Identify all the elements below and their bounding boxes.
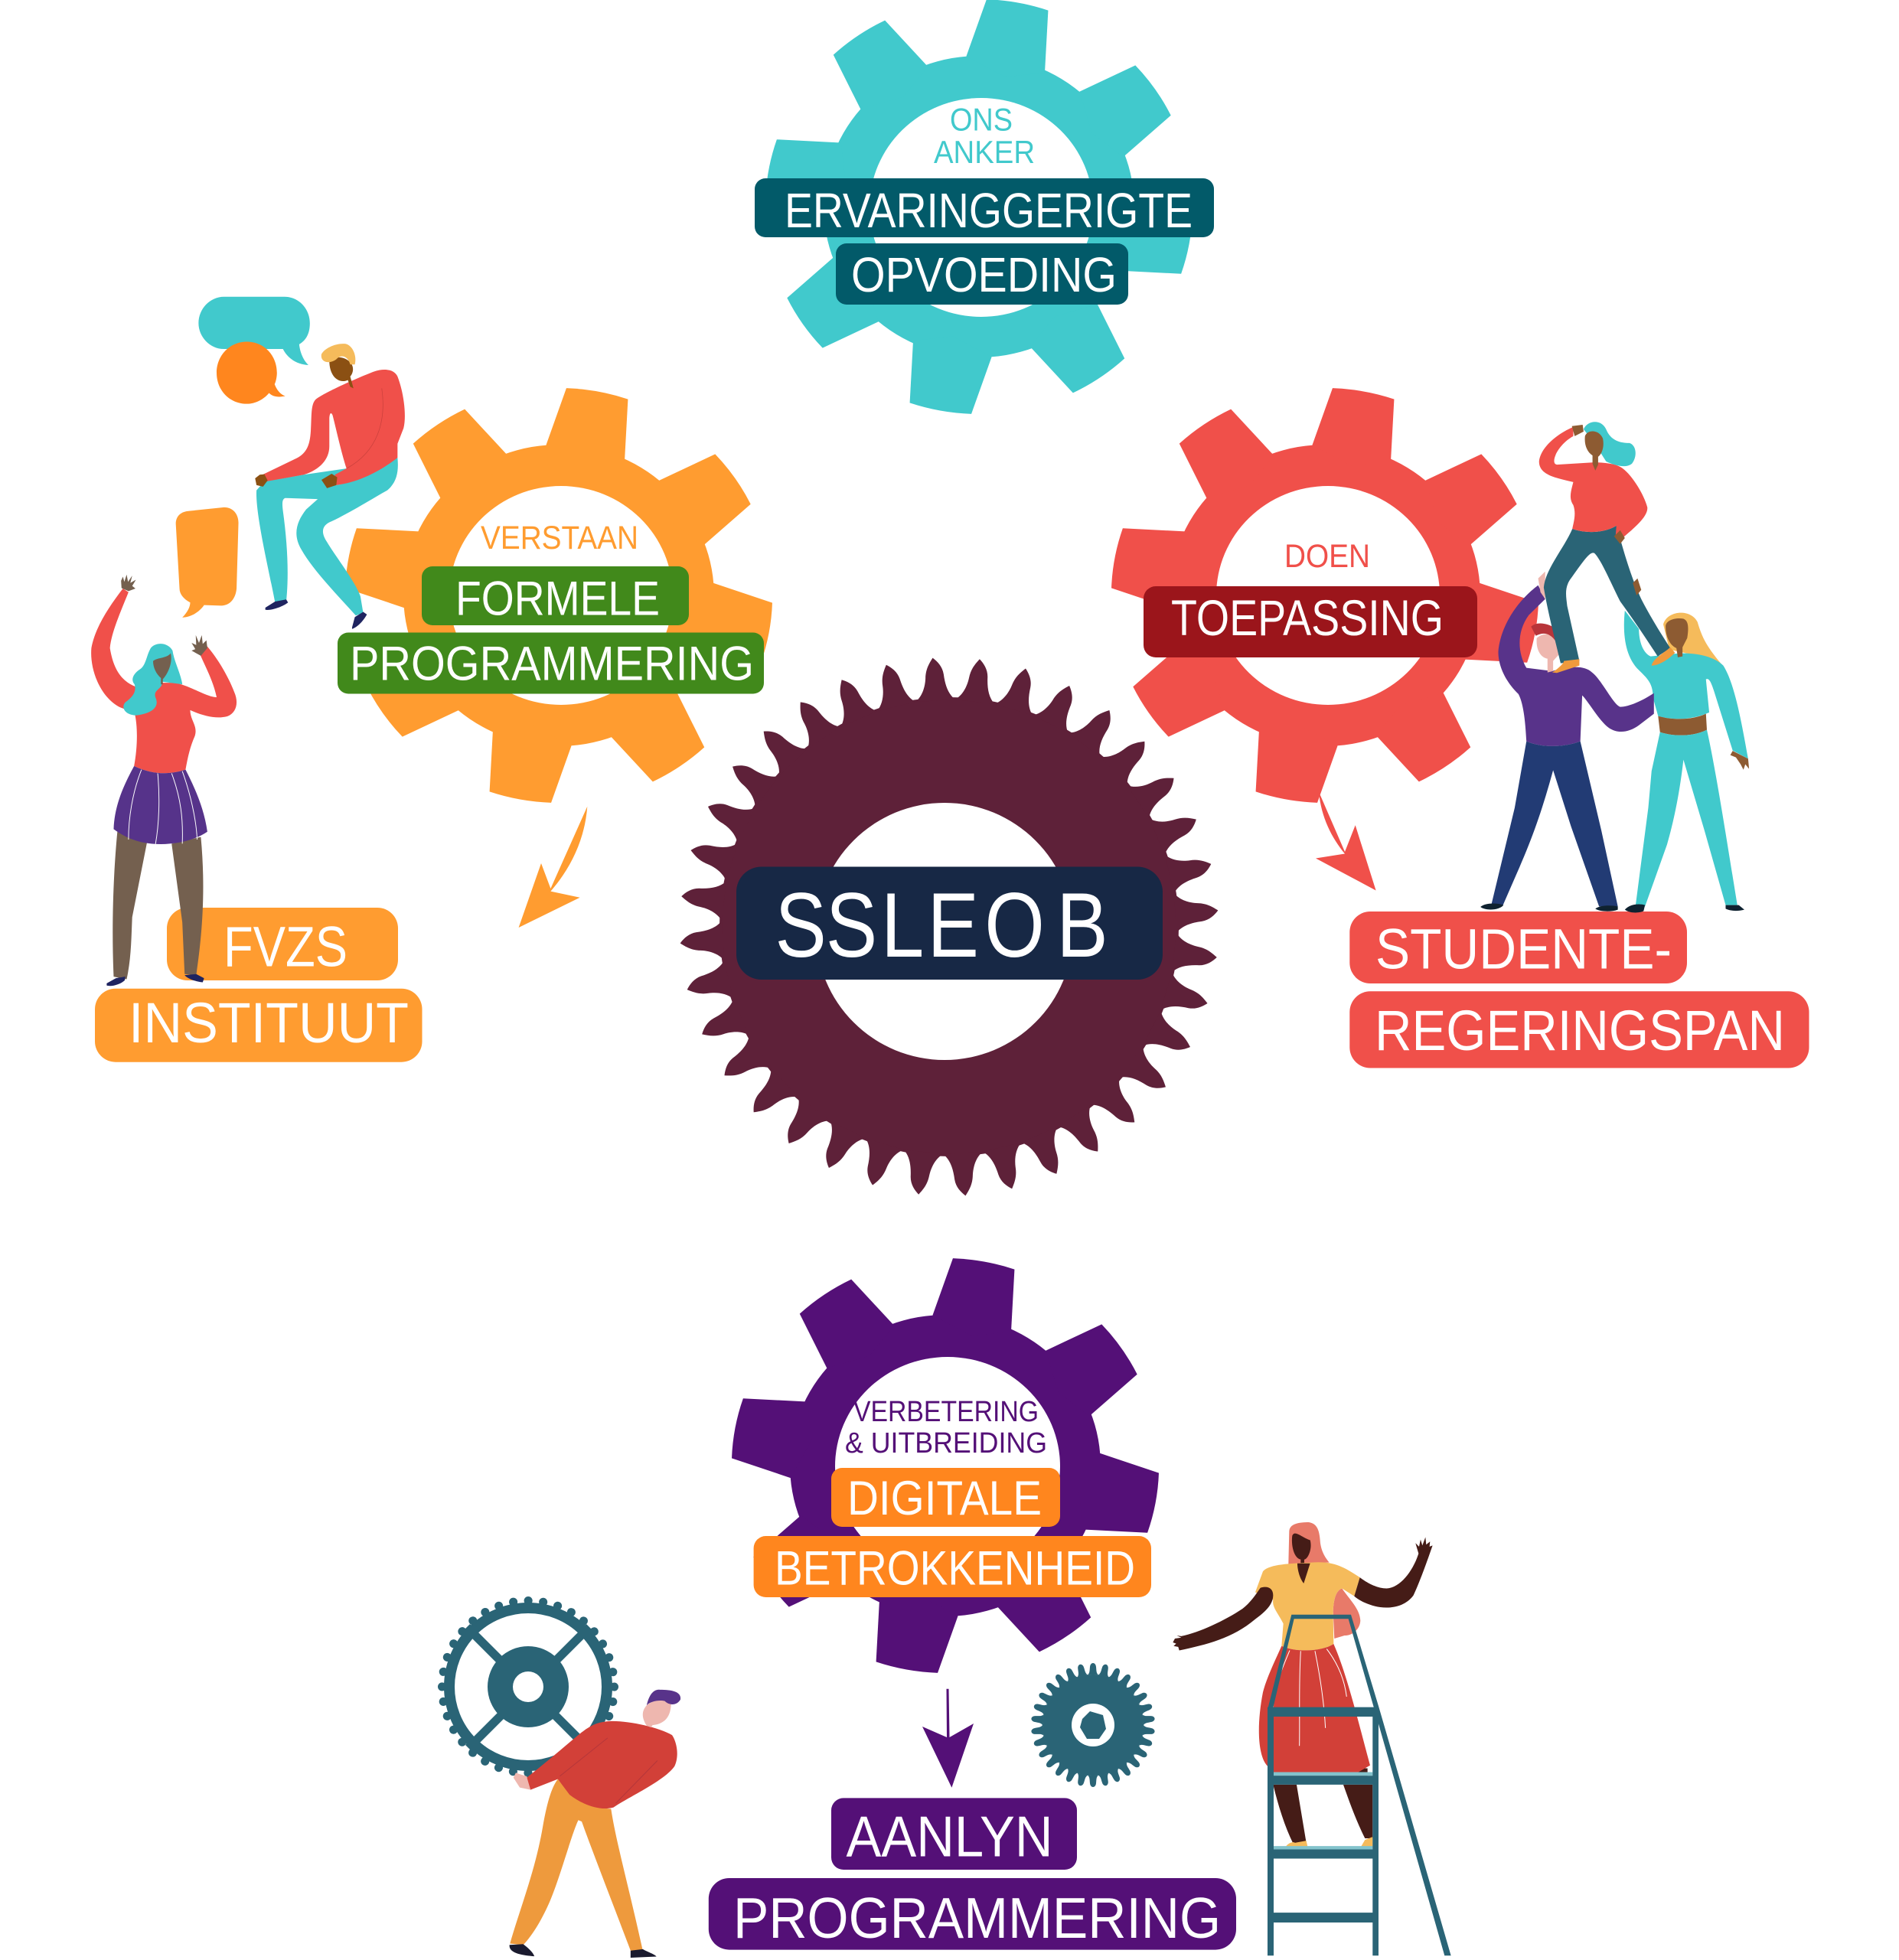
label: betrokkenheid: BETROKKENHEID <box>775 1542 1135 1596</box>
arrow: purple <box>922 1689 974 1788</box>
label: ervaringgerigte: ERVARINGGERIGTE <box>785 183 1193 238</box>
label: ons anker: ANKER <box>934 134 1035 170</box>
label: aanlyn programmering <box>709 1798 1236 1950</box>
label: aanlyn programmering: PROGRAMMERING <box>733 1886 1221 1950</box>
gear: ons anker <box>761 0 1197 419</box>
label: ons anker <box>934 102 1035 170</box>
title: ssleob: SSLEOB <box>775 875 1108 977</box>
label: studente-regeringspan: STUDENTE- <box>1375 917 1672 980</box>
icon: large spoked gear <box>442 1601 614 1772</box>
label: doen: DOEN <box>1284 538 1370 575</box>
label: studente-regeringspan: REGERINGSPAN <box>1375 999 1785 1062</box>
speech bubble: orange <box>217 342 286 404</box>
panel: teal gear <box>755 0 1214 419</box>
gear: verbetering <box>727 1254 1163 1678</box>
label: studente-regeringspan <box>1349 912 1809 1068</box>
figure group: human pyramid <box>1480 422 1749 912</box>
label: aanlyn programmering: AANLYN <box>847 1805 1053 1869</box>
label: toepassing: TOEPASSING <box>1171 589 1444 646</box>
central gear: ssleob <box>679 657 1219 1197</box>
gear: verstaan <box>341 383 777 807</box>
label: verbetering en uitbreiding <box>845 1396 1047 1459</box>
figure: man carrying gear <box>510 1690 680 1958</box>
label: verbetering en uitbreiding: VERBETERING <box>853 1396 1039 1428</box>
speech bubble: orange square <box>176 507 239 618</box>
figure: woman on ladder <box>1173 1522 1451 1955</box>
label: fvzs instituut: INSTITUUT <box>129 991 409 1055</box>
panel: purple gear <box>727 1254 1163 1788</box>
arrow: red <box>1316 792 1376 891</box>
label: ons anker: ONS <box>950 102 1013 138</box>
arrow: orange <box>519 807 587 928</box>
figure: woman on top <box>1539 422 1675 673</box>
figure: teal woman <box>1624 611 1749 912</box>
label: opvoeding: OPVOEDING <box>851 247 1117 302</box>
label: programmering green: PROGRAMMERING <box>350 638 754 691</box>
panel: orange gear <box>338 383 777 928</box>
label: fvzs instituut <box>95 908 423 1062</box>
label: formele: FORMELE <box>455 572 660 626</box>
icon: small gear <box>1031 1663 1155 1787</box>
label: verbetering en uitbreiding: & UITBREIDING <box>845 1427 1047 1459</box>
figure: waving woman <box>91 575 237 986</box>
speech bubble: teal <box>198 297 310 365</box>
label: digitale: DIGITALE <box>847 1472 1042 1525</box>
label: fvzs instituut: FVZS <box>224 915 347 979</box>
figure group: top left <box>91 297 405 986</box>
figure: seated man <box>255 344 405 629</box>
figure: purple man <box>1480 572 1654 912</box>
gear: doen <box>1107 383 1543 807</box>
label: verstaan: VERSTAAN <box>481 520 638 556</box>
panel: red gear <box>1107 383 1543 891</box>
gear wheel <box>679 657 1219 1197</box>
